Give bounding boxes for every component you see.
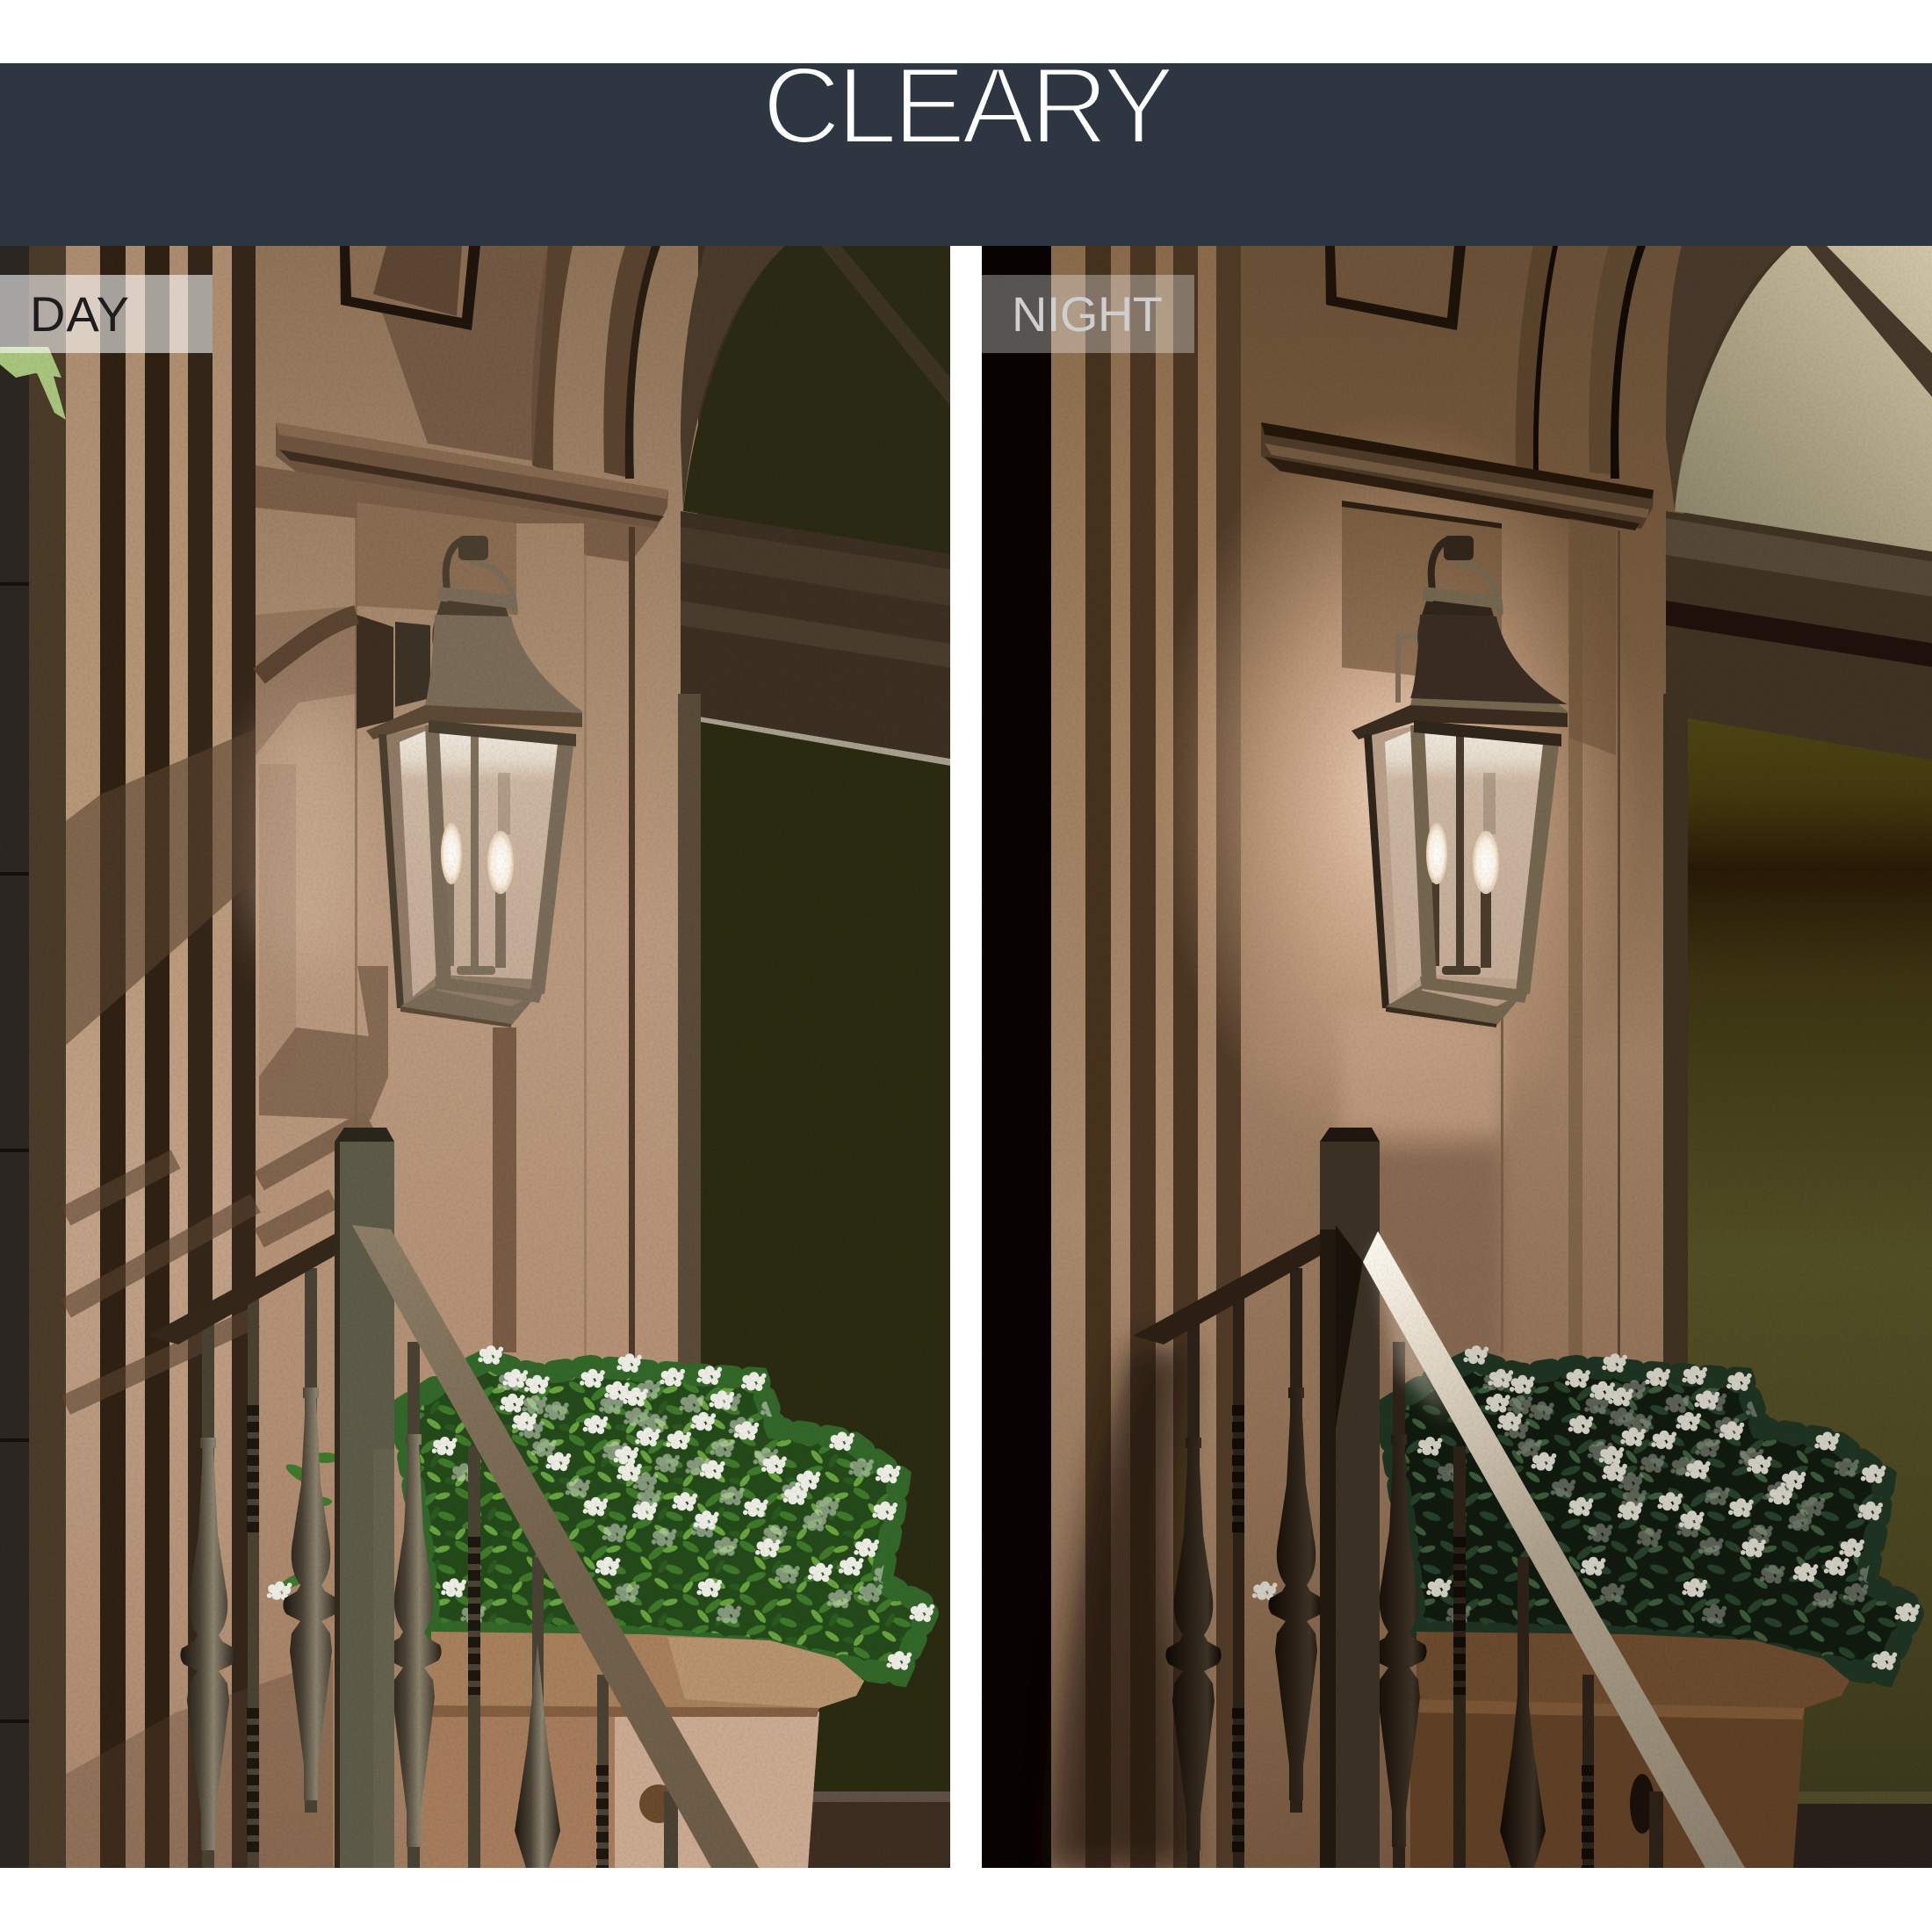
window light on wall (246, 703, 369, 966)
title: CLEARY (762, 46, 1175, 167)
foliage (1386, 1360, 1915, 1675)
wall (1051, 246, 1683, 1868)
fluted stripes (66, 246, 256, 1868)
lower window (678, 694, 950, 1868)
flowers (1252, 1345, 1932, 1697)
shadow below cornice (256, 465, 656, 562)
rail glow (1372, 1238, 1451, 1423)
sun shadows on stripes and wall (66, 606, 388, 1868)
panel base (698, 246, 950, 766)
left handrail (148, 1234, 335, 1344)
right handrail (352, 1225, 759, 1868)
header band (0, 63, 1932, 246)
lantern (1352, 536, 1568, 1027)
arch mouldings (531, 246, 785, 509)
urn planter (425, 1632, 864, 1868)
leaf sprig (0, 347, 66, 420)
label: NIGHT (982, 275, 1194, 353)
lantern (366, 536, 582, 1027)
surface grain (0, 246, 950, 1868)
panel: night photo (982, 246, 1932, 1869)
panel: day photo (0, 246, 954, 1869)
flowers (267, 1345, 954, 1697)
newel post (1320, 1128, 1380, 1868)
lower window (1663, 694, 1932, 1868)
label: NIGHT: NIGHT (1012, 286, 1163, 342)
recess panel (1342, 501, 1620, 1365)
lantern bracket and wall shadow (259, 615, 430, 729)
lantern glow on wall (1152, 413, 1644, 1168)
lit window arch (1675, 246, 1932, 551)
dark column (982, 246, 1051, 1868)
wall (256, 246, 698, 1868)
cornice (276, 422, 668, 529)
arch mouldings (1516, 246, 1791, 511)
foliage (400, 1360, 930, 1675)
window band (1666, 511, 1932, 761)
left handrail (1133, 1234, 1320, 1344)
lit cone below lantern (1342, 1010, 1502, 1133)
post and rail shadow (1051, 1344, 1192, 1868)
keystone panel (1325, 246, 1466, 330)
dark lantern roof (1410, 615, 1568, 704)
keystone panel (340, 246, 480, 330)
wall shadow above cornice (378, 246, 548, 461)
newel post (335, 1128, 394, 1868)
urn planter (1410, 1632, 1849, 1868)
window band (681, 511, 950, 766)
lit handrail (1363, 1231, 1745, 1868)
cornice (1261, 422, 1654, 530)
white gutter (950, 246, 982, 1868)
label: DAY: DAY (30, 286, 129, 342)
balusters (1165, 1268, 1663, 1869)
fluted stripes (1051, 246, 1241, 1868)
window arch (683, 246, 950, 554)
stone column (0, 246, 66, 1868)
bracket (1398, 637, 1433, 703)
panel base (982, 246, 1932, 1868)
recess panel (355, 502, 635, 1381)
surface grain (982, 246, 1932, 1868)
dark zone behind post (1337, 1150, 1502, 1405)
leaves behind post (279, 1453, 339, 1591)
balusters (180, 1268, 678, 1869)
label: DAY (0, 275, 213, 353)
